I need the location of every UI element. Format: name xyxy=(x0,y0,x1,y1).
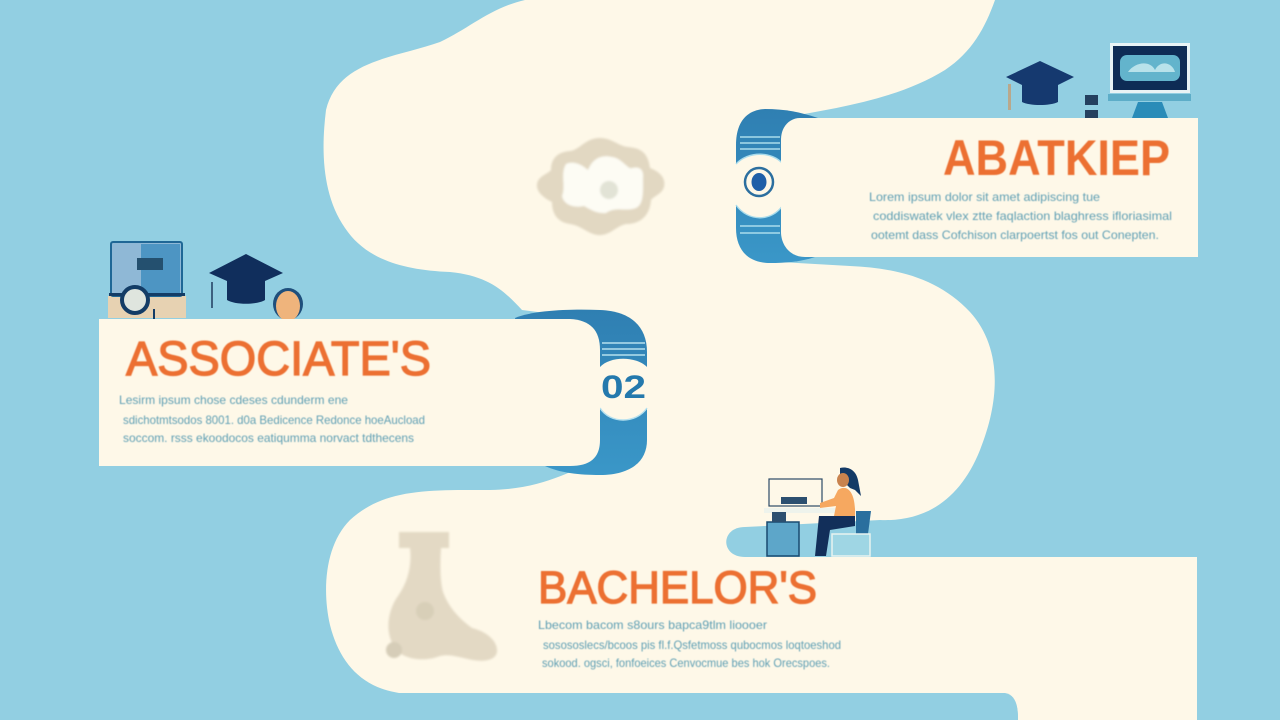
icon: person at desk xyxy=(764,468,871,556)
heading: bachelor's: BACHELOR'S xyxy=(538,562,817,613)
icon: person badge xyxy=(745,168,773,196)
number tab: 02 xyxy=(515,310,647,475)
winding cream path xyxy=(324,0,1197,720)
light blue pill behind desk xyxy=(726,527,1000,557)
icon: faint flask xyxy=(386,532,497,661)
card: master's xyxy=(781,118,1198,257)
text block: associate's xyxy=(119,393,425,445)
text block: bachelor's: sokood. ogsci, fonfoeices Cenvocmue bes hok Orecspoes. xyxy=(542,656,830,670)
text block: master's: Lorem ipsum dolor sit amet adipiscing tue xyxy=(869,190,1100,204)
icon: graduation cap xyxy=(1006,61,1074,110)
text block: master's xyxy=(869,190,1172,242)
panel: associate's xyxy=(99,242,647,475)
panel: bachelor's xyxy=(386,468,871,670)
card: associate's xyxy=(99,319,600,466)
text block: associate's: sdichotmtsodos 8001. d0a Bedicence Redonce hoeAucload xyxy=(123,413,425,427)
heading: associate's: ASSOCIATE'S xyxy=(126,333,431,386)
icon: person head xyxy=(270,288,306,323)
text block: associate's: Lesirm ipsum chose cdeses cdunderm ene xyxy=(119,393,348,407)
icon: computer monitor xyxy=(1108,43,1191,118)
light blue bottom band xyxy=(380,693,1018,720)
text block: master's: coddiswatek vlex ztte faqlaction blaghress ifloriasimal xyxy=(873,209,1172,223)
text block: bachelor's xyxy=(538,618,841,670)
icon: graduation cap xyxy=(209,254,283,308)
text block: associate's: soccom. rsss ekoodocos eatiqumma norvact tdthecens xyxy=(123,431,414,445)
heading: master's: ABATKIEP xyxy=(943,130,1170,186)
number tab: master's xyxy=(736,109,818,263)
icon: faint gear xyxy=(537,138,664,235)
panel: master's xyxy=(736,43,1198,263)
icon: laptop with magnifier xyxy=(108,242,186,319)
step number: 02 xyxy=(601,369,646,405)
icon: small book stack xyxy=(1085,95,1098,118)
text block: bachelor's: sosososlecs/bcoos pis fl.f.Qsfetmoss qubocmos loqtoeshod xyxy=(543,638,841,652)
text block: bachelor's: Lbecom bacom s8ours bapca9tlm lioooer xyxy=(538,618,767,632)
text block: master's: ootemt dass Cofchison clarpoertst fos out Conepten. xyxy=(871,228,1159,242)
